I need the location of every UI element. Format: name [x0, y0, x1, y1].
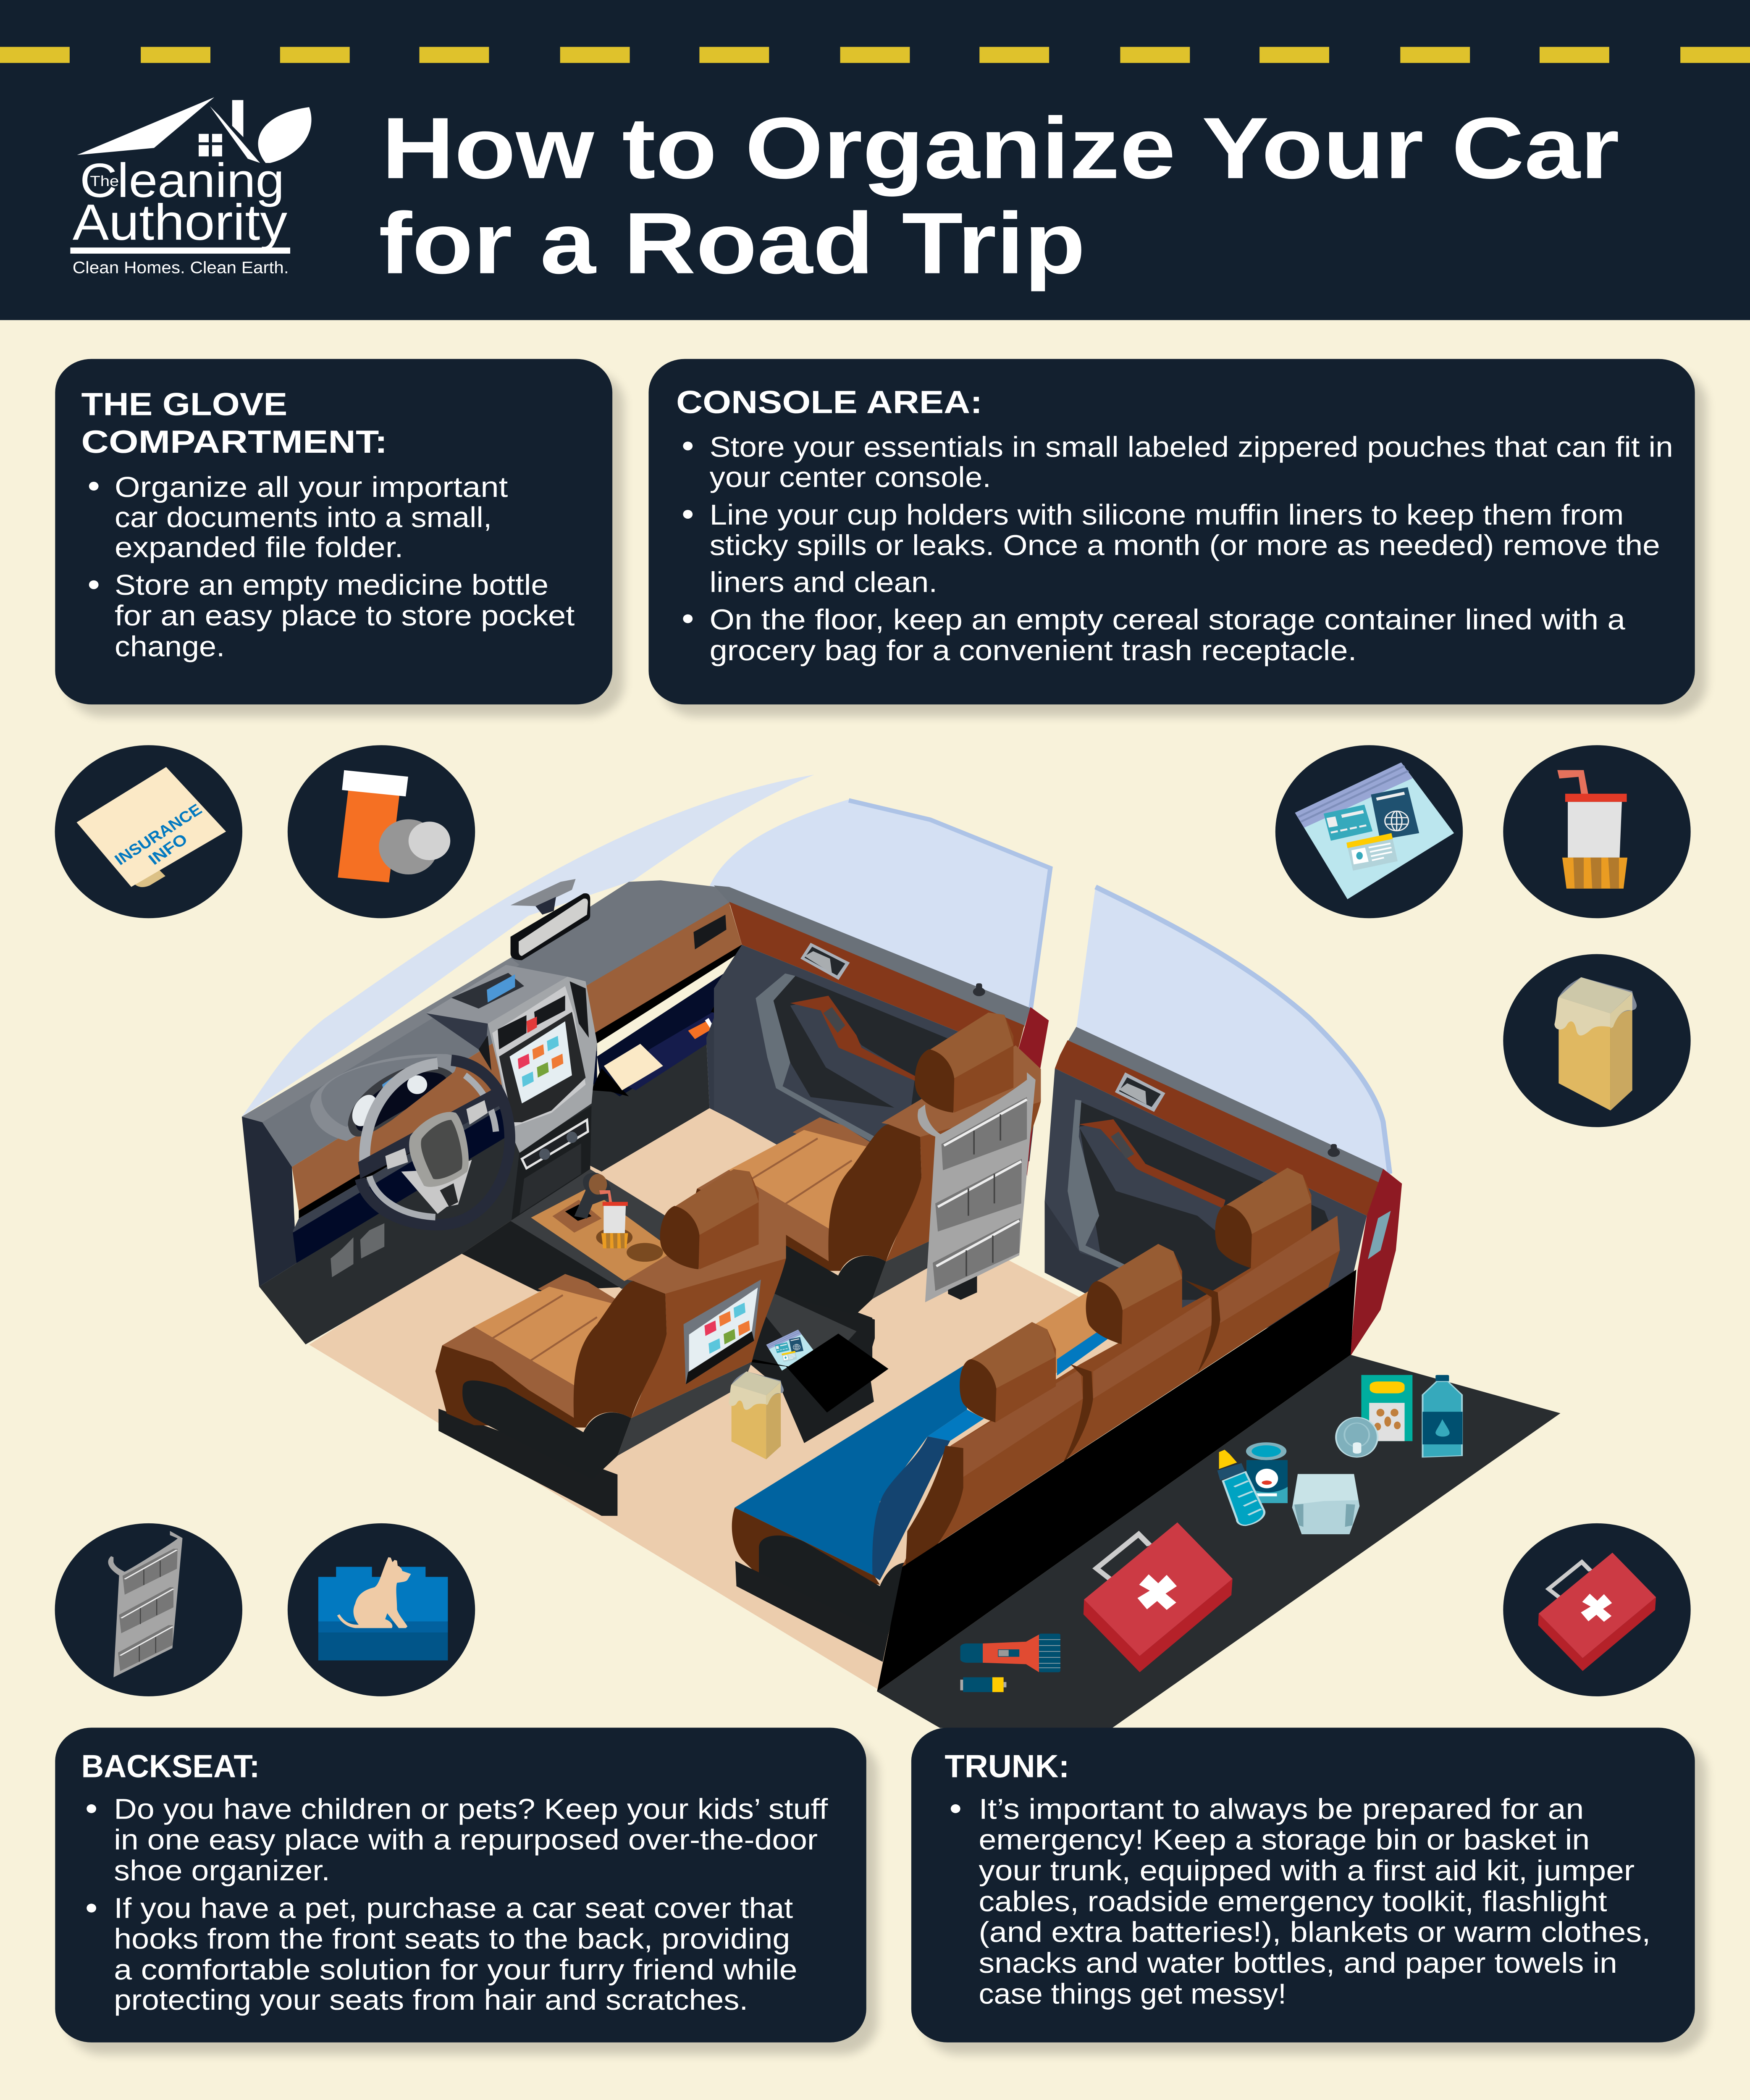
bullet list: Line your cup holders with silicone muffin liners to keep them from	[710, 499, 1624, 531]
panel: console area	[648, 359, 1706, 717]
mini cup	[599, 1190, 628, 1248]
bullet list: your center console.	[710, 462, 991, 494]
heading: CONSOLE AREA:	[676, 385, 982, 421]
icon: pet on seat cover	[288, 1523, 475, 1696]
wood trim	[292, 903, 742, 1210]
screen	[499, 1012, 585, 1122]
bullet list: your trunk, equipped with a first aid kit, jumper	[979, 1855, 1635, 1887]
bullet list	[683, 431, 1673, 667]
lower dash	[259, 1038, 709, 1344]
heading: BACKSEAT:	[81, 1749, 260, 1785]
logo: The	[90, 174, 119, 190]
dash top	[242, 880, 731, 1167]
bullet list: snacks and water bottles, and paper towels in	[979, 1947, 1617, 1979]
bullet list: hooks from the front seats to the back, providing	[114, 1923, 790, 1956]
title: for a Road Trip	[379, 194, 1086, 292]
window switch	[800, 943, 850, 980]
bullet list: If you have a pet, purchase a car seat cover that	[114, 1893, 793, 1924]
heading	[81, 387, 388, 461]
baby bottle	[1217, 1450, 1265, 1525]
flashlight	[960, 1634, 1060, 1672]
bullet list: car documents into a small,	[115, 501, 492, 534]
wall below window	[706, 948, 924, 1143]
dark back-seat bin and floor stool	[747, 1294, 875, 1443]
rear door lock	[1328, 1144, 1340, 1157]
bullet list: Store an empty medicine bottle	[115, 569, 548, 601]
driver seat	[436, 1169, 786, 1516]
icon: insurance folder	[55, 745, 242, 918]
first aid kit	[1084, 1522, 1233, 1672]
bullet list: expanded file folder.	[115, 532, 404, 564]
bullet list: case things get messy!	[979, 1978, 1286, 2010]
instrument hood	[310, 1054, 457, 1141]
door wood	[729, 902, 1024, 1055]
bench backs	[902, 1168, 1340, 1582]
cereal box	[1361, 1375, 1412, 1441]
gear shift	[574, 1173, 611, 1218]
center stack	[488, 976, 597, 1153]
pedals	[331, 1223, 384, 1277]
heading: TRUNK:	[945, 1749, 1069, 1785]
icon: first aid kit	[1503, 1523, 1691, 1696]
icon: document pouch	[1275, 745, 1463, 918]
bullet list	[87, 1793, 828, 2016]
speaker	[719, 1048, 765, 1102]
center console	[310, 879, 688, 1292]
trunk items	[960, 1375, 1463, 1692]
title: How to Organize Your Car	[382, 99, 1619, 197]
sill	[714, 885, 1031, 1027]
mini document pouch	[766, 1330, 814, 1370]
headrest 2	[1086, 1244, 1182, 1344]
logo	[70, 97, 311, 277]
floor	[309, 1098, 1161, 1701]
glove papers	[604, 1044, 663, 1090]
instrument cluster	[347, 1066, 456, 1137]
panel: the glove compartment	[55, 359, 624, 717]
bullet list: grocery bag for a convenient trash receptacle.	[710, 635, 1357, 667]
icon: shoe organizer	[55, 1523, 242, 1696]
mini bag	[729, 1371, 784, 1460]
panel: trunk	[911, 1728, 1706, 2055]
black seat-back table	[749, 1334, 889, 1412]
wood behind wheel	[378, 1056, 474, 1137]
bullet list: On the floor, keep an empty cereal storage container lined with a	[710, 604, 1625, 636]
glove compartment	[597, 963, 742, 1097]
logo: Authority	[73, 196, 287, 252]
water bottle	[1422, 1375, 1463, 1457]
icon: cereal container trash bag	[1503, 954, 1691, 1127]
diaper	[1292, 1474, 1359, 1534]
icon: medicine bottle	[288, 745, 475, 918]
front door panel	[714, 885, 1049, 1176]
dashboard	[242, 880, 924, 1344]
bullet list: Store your essentials in small labeled zippered pouches that can fit in	[710, 431, 1673, 463]
icon: cup with liner	[1503, 745, 1691, 918]
bullet list: for an easy place to store pocket	[115, 600, 575, 632]
bullet list: in one easy place with a repurposed over-the-door	[114, 1824, 818, 1856]
headrest 1	[960, 1322, 1056, 1423]
bullet list: liners and clean.	[710, 567, 937, 598]
icon: insurance folder: INFO	[146, 832, 192, 869]
bullet list	[951, 1793, 1650, 2010]
headrest 3	[1215, 1168, 1312, 1268]
panel: backseat	[55, 1728, 878, 2055]
glove bottle	[688, 1018, 714, 1039]
logo: Cleaning	[80, 153, 284, 207]
trunk floor	[877, 1355, 1561, 1728]
lower controls	[522, 1120, 588, 1168]
passenger seat	[690, 1013, 1041, 1359]
side of dash	[242, 1117, 296, 1286]
upper cushion	[1034, 1290, 1111, 1374]
bullet list	[89, 471, 575, 663]
seat-back tablet	[684, 1280, 761, 1384]
organizer on seat back	[918, 1072, 1036, 1302]
formula can	[1246, 1442, 1288, 1503]
back bench	[732, 1168, 1356, 1691]
stack top	[426, 965, 567, 1024]
bullet list: (and extra batteries!), blankets or warm clothes,	[979, 1916, 1650, 1949]
bullet list: Organize all your important	[115, 471, 508, 504]
header banner	[0, 0, 1750, 320]
bullet list: It’s important to always be prepared for an	[979, 1793, 1584, 1825]
bullet list: a comfortable solution for your furry friend while	[114, 1954, 798, 1986]
icon: insurance folder: INSURANCE	[113, 802, 206, 869]
seat cover	[732, 1333, 1110, 1662]
steering wheel	[358, 1060, 510, 1225]
rear door	[1045, 1027, 1402, 1357]
vent	[693, 915, 727, 949]
bullet list: shoe organizer.	[114, 1855, 330, 1887]
bullet list: change.	[115, 631, 225, 663]
bullet list: Do you have children or pets? Keep your kids’ stuff	[114, 1793, 828, 1825]
bullet list: protecting your seats from hair and scratches.	[114, 1984, 748, 2016]
cluster display	[451, 973, 524, 1008]
mirror	[511, 879, 590, 960]
heading: COMPARTMENT:	[81, 425, 388, 461]
title	[379, 99, 1619, 292]
black side wall	[877, 1270, 1356, 1691]
door lock	[973, 983, 985, 996]
windows	[242, 774, 1391, 1176]
bullet list: emergency! Keep a storage bin or basket in	[979, 1824, 1590, 1856]
logo: Clean Homes. Clean Earth.	[73, 258, 289, 277]
console tray	[511, 1169, 688, 1289]
bullet list: sticky spills or leaks. Once a month (or more as needed) remove the	[710, 530, 1660, 562]
bullet list: cables, roadside emergency toolkit, flashlight	[979, 1886, 1607, 1918]
tin can	[1336, 1418, 1377, 1457]
battery	[960, 1677, 1006, 1692]
heading: THE GLOVE	[81, 387, 287, 423]
